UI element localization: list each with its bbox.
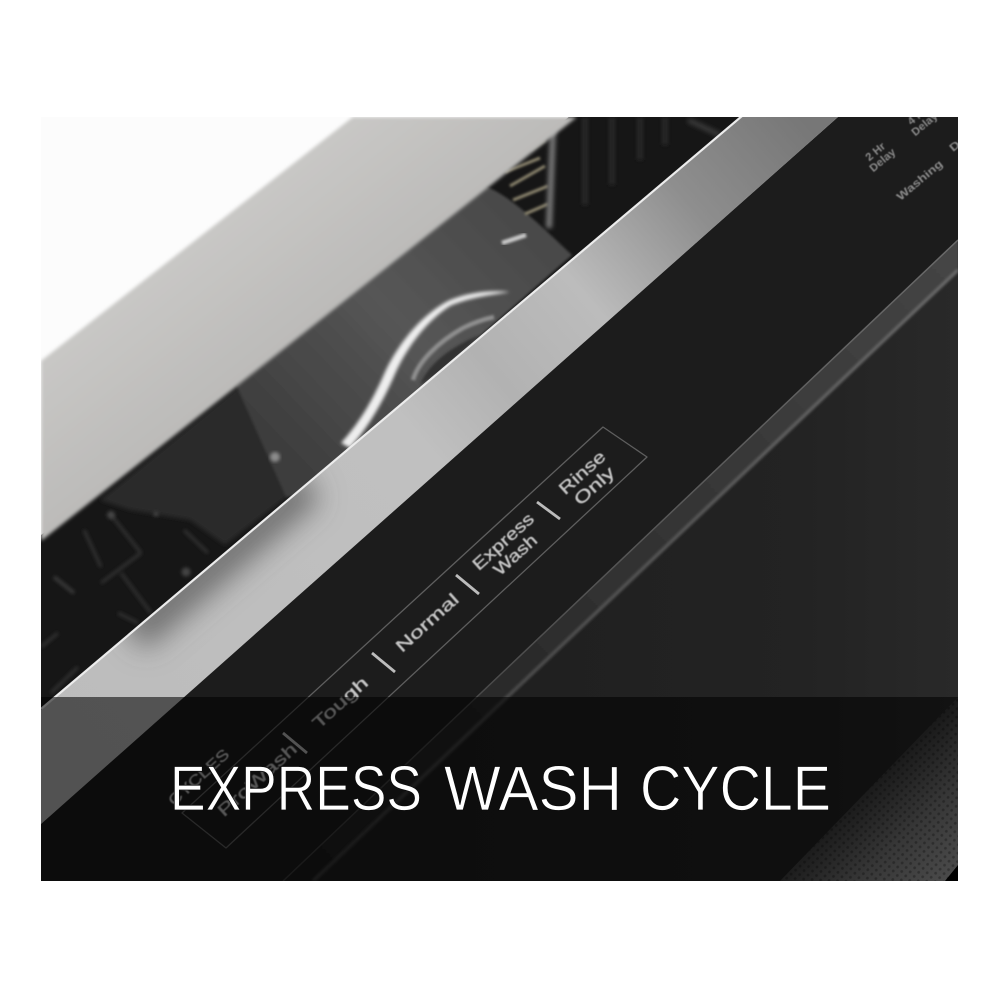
black control panel	[41, 117, 958, 881]
silver door trim	[41, 117, 838, 824]
door lower highlight line	[313, 270, 958, 881]
textured handle area	[780, 697, 958, 881]
cycle labels	[165, 447, 622, 820]
bright trim edge	[41, 116, 742, 709]
bowl rim	[413, 317, 494, 380]
label: normal: Normal	[392, 590, 463, 656]
dishwasher interior	[41, 112, 760, 725]
lower rack wires	[41, 515, 208, 693]
handle corner	[945, 865, 958, 881]
label: cycles: CYCLES	[165, 746, 233, 809]
handle dots	[786, 716, 958, 881]
label: rinse only: Rinse	[555, 447, 609, 498]
upper rack stripes	[549, 117, 720, 228]
bowl highlight	[341, 291, 510, 448]
cycle dividers	[283, 502, 560, 753]
title	[170, 754, 831, 824]
label: express wash: Wash	[490, 531, 541, 580]
label: rinse only	[558, 452, 614, 504]
caption overlay band	[41, 697, 958, 881]
label: 4 hr delay: Delay	[910, 110, 941, 139]
rack joints	[107, 511, 190, 576]
bowl rim centre	[420, 335, 480, 385]
photo: dishwasher with door ajar	[41, 101, 989, 881]
label: 4 hr delay: 4 Hr	[906, 104, 931, 128]
gray countertop edge	[41, 117, 577, 541]
status labels top right	[865, 117, 958, 200]
gold wires	[505, 140, 548, 214]
label: prowash: ProWash	[214, 739, 301, 820]
label: rinse only: Only	[570, 462, 619, 509]
lower door	[283, 240, 958, 881]
large gray bowl	[236, 185, 572, 497]
bowl blob	[270, 452, 280, 462]
label: 2 hr delay	[865, 142, 896, 172]
door recessed strip	[478, 241, 958, 697]
white countertop	[41, 117, 958, 881]
title: EXPRESS	[170, 754, 422, 824]
title: WASH	[444, 754, 622, 824]
label: tough: Tough	[309, 673, 372, 733]
label: washing: Washing	[895, 158, 945, 203]
dark bowl	[100, 385, 290, 545]
label: drying: Drying	[947, 117, 989, 154]
label: 2 hr delay: 2 Hr	[864, 140, 889, 164]
cycles selection outline	[182, 427, 647, 848]
infographic: dishwasher photo with caption	[41, 117, 958, 881]
title: CYCLE	[640, 754, 831, 824]
door upper edge line	[283, 240, 958, 881]
label: 2 hr delay: Delay	[868, 146, 899, 175]
label: express wash: Express	[469, 509, 538, 574]
small highlight	[502, 235, 526, 243]
silver dark streak	[120, 470, 320, 650]
label: 4 hr delay	[908, 117, 938, 136]
